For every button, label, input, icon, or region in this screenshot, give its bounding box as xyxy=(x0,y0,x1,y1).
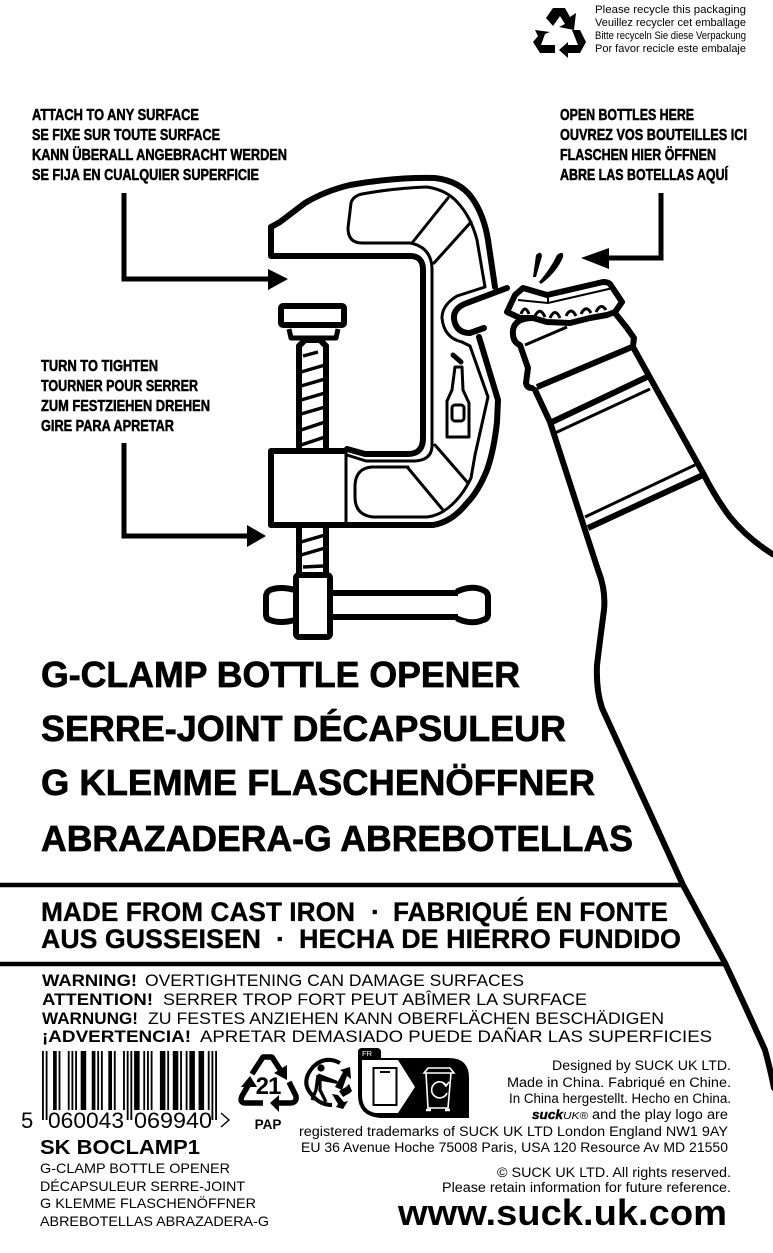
icon: PAP 21 recycling mark: PAP xyxy=(255,1117,281,1132)
bottle outline xyxy=(535,390,773,1088)
icon: Triman recycling person xyxy=(306,1060,352,1109)
callout: attach to any surface: ATTACH TO ANY SURFACE xyxy=(32,107,199,124)
text: material statement: MADE FROM CAST IRON xyxy=(41,897,355,927)
callout: open bottles here: ABRE LAS BOTELLAS AQUÍ xyxy=(560,165,728,184)
text: company information: registered trademarks of SUCK UK LTD London England NW1 9AY xyxy=(299,1124,728,1139)
bottle lip xyxy=(513,313,634,388)
callout: open bottles here: FLASCHEN HIER ÖFFNEN xyxy=(560,145,716,164)
text: material statement: · xyxy=(371,897,380,927)
screw xyxy=(281,306,344,572)
text: warnings: OVERTIGHTENING CAN DAMAGE SURFACES xyxy=(145,971,524,990)
text: warnings: WARNING! xyxy=(42,971,137,990)
clamp block xyxy=(271,451,347,525)
callout: turn to tighten: ZUM FESTZIEHEN DREHEN xyxy=(41,398,210,415)
text: material statement: AUS GUSSEISEN xyxy=(41,924,261,954)
title: product name in four languages: SERRE-JOINT DÉCAPSULEUR xyxy=(41,708,566,749)
packaging glyph xyxy=(374,1068,396,1105)
clamp outer body xyxy=(271,227,423,454)
callout: turn to tighten: GIRE PARA APRETAR xyxy=(41,418,174,435)
barcode digits xyxy=(21,1108,229,1133)
callout: attach to any surface: KANN ÜBERALL ANGEBRACHT WERDEN xyxy=(32,145,287,164)
tommy bar xyxy=(266,575,488,637)
callout: turn to tighten: TURN TO TIGHTEN xyxy=(41,358,158,375)
text: company information: Made in China. Fabriqué en Chine. xyxy=(507,1075,731,1090)
icon: Info-tri sorting pictogram xyxy=(358,1048,469,1118)
text: company information: Designed by SUCK UK LTD. xyxy=(552,1058,731,1073)
text: recycle notice: Veuillez recycler cet emballage xyxy=(595,17,746,29)
logo: suck UK wordmark: suck xyxy=(532,1107,564,1122)
icon: recycling symbol xyxy=(533,8,586,58)
title: product name in four languages: ABRAZADERA-G ABREBOTELLAS xyxy=(41,818,633,859)
callout: attach to any surface: SE FIXE SUR TOUTE SURFACE xyxy=(32,127,220,144)
text: warnings: ¡ADVERTENCIA! xyxy=(42,1027,191,1046)
icon: small bottle xyxy=(447,355,469,437)
barcode xyxy=(21,1051,229,1133)
text: material statement: · xyxy=(276,924,285,954)
text: recycle notice: Please recycle this packaging xyxy=(595,4,746,16)
text: company information: EU 36 Avenue Hoche 75008 Paris, USA 120 Resource Av MD 21550 xyxy=(301,1140,728,1155)
text: recycle notice: Por favor recicle este embalaje xyxy=(595,43,746,55)
text: warnings xyxy=(42,971,712,1046)
text: material statement xyxy=(41,896,681,954)
icon: PAP 21 recycling mark xyxy=(241,1057,296,1132)
bin glyph xyxy=(424,1068,454,1110)
text: company information: In China hergestellt. Hecho en China. xyxy=(509,1091,731,1106)
text: product code: SK BOCLAMP1 xyxy=(40,1137,200,1159)
barcode digits: 069940 xyxy=(134,1108,212,1133)
icon: Info-tri sorting pictogram: FR xyxy=(362,1049,373,1058)
arrow: turn to tighten xyxy=(124,443,266,547)
neck stripes xyxy=(537,347,703,528)
text: warnings: APRETAR DEMASIADO PUEDE DAÑAR LAS SUPERFICIES xyxy=(200,1027,712,1046)
title: product name in four languages xyxy=(41,654,633,859)
text: warnings: ZU FESTES ANZIEHEN KANN OBERFLÄCHEN BESCHÄDIGEN xyxy=(148,1009,664,1028)
text: warnings: WARNUNG! xyxy=(42,1009,138,1028)
callout: turn to tighten: TOURNER POUR SERRER xyxy=(41,378,198,395)
clamp inner lines xyxy=(348,187,488,517)
title: product name in four languages: G KLEMME FLASCHENÖFFNER xyxy=(41,762,595,803)
callout: open bottles here xyxy=(560,107,747,184)
text: website: www.suck.uk.com xyxy=(397,1192,727,1233)
logo: suck UK wordmark: UK® xyxy=(563,1111,589,1122)
text: product descriptions: G-CLAMP BOTTLE OPENER xyxy=(40,1160,230,1176)
text: warnings: ATTENTION! xyxy=(42,990,153,1009)
text: company information: © SUCK UK LTD. All rights reserved. xyxy=(497,1165,731,1180)
text: material statement: HECHA DE HIERRO FUNDIDO xyxy=(299,924,681,954)
title: product name in four languages: G-CLAMP BOTTLE OPENER xyxy=(41,654,520,695)
arrow: attach xyxy=(124,193,288,290)
text: recycle notice: Bitte recyceln Sie diese Verpackung xyxy=(595,30,746,42)
spark marks xyxy=(533,253,563,284)
text: product descriptions xyxy=(40,1160,269,1229)
icon: PAP 21 recycling mark: 21 xyxy=(256,1073,281,1100)
illustration: G-clamp xyxy=(266,178,507,637)
barcode digits: 060043 xyxy=(48,1108,124,1133)
callout: open bottles here: OPEN BOTTLES HERE xyxy=(560,107,694,124)
callout: attach to any surface: SE FIJA EN CUALQUIER SUPERFICIE xyxy=(32,167,259,184)
barcode digits: 5 xyxy=(21,1108,33,1133)
arrow: open bottles xyxy=(581,193,661,269)
callout: attach to any surface xyxy=(32,107,287,184)
text: recycle notice xyxy=(595,4,746,55)
logo: suck UK wordmark xyxy=(532,1107,589,1122)
text: company information: Please retain information for future reference. xyxy=(442,1180,731,1195)
text: product descriptions: G KLEMME FLASCHENÖFFNER xyxy=(40,1194,256,1211)
text: warnings: SERRER TROP FORT PEUT ABÎMER LA SURFACE xyxy=(163,990,587,1009)
text: product descriptions: DÉCAPSULEUR SERRE-JOINT xyxy=(40,1178,245,1194)
text: company information: and the play logo are xyxy=(592,1107,728,1122)
text: material statement: FABRIQUÉ EN FONTE xyxy=(393,896,668,927)
text: company information xyxy=(299,1058,731,1195)
text: product descriptions: ABREBOTELLAS ABRAZADERA-G xyxy=(40,1213,269,1229)
bottle cap xyxy=(507,282,622,323)
callout: turn to tighten xyxy=(41,358,210,435)
illustration: bottle xyxy=(507,253,773,1088)
